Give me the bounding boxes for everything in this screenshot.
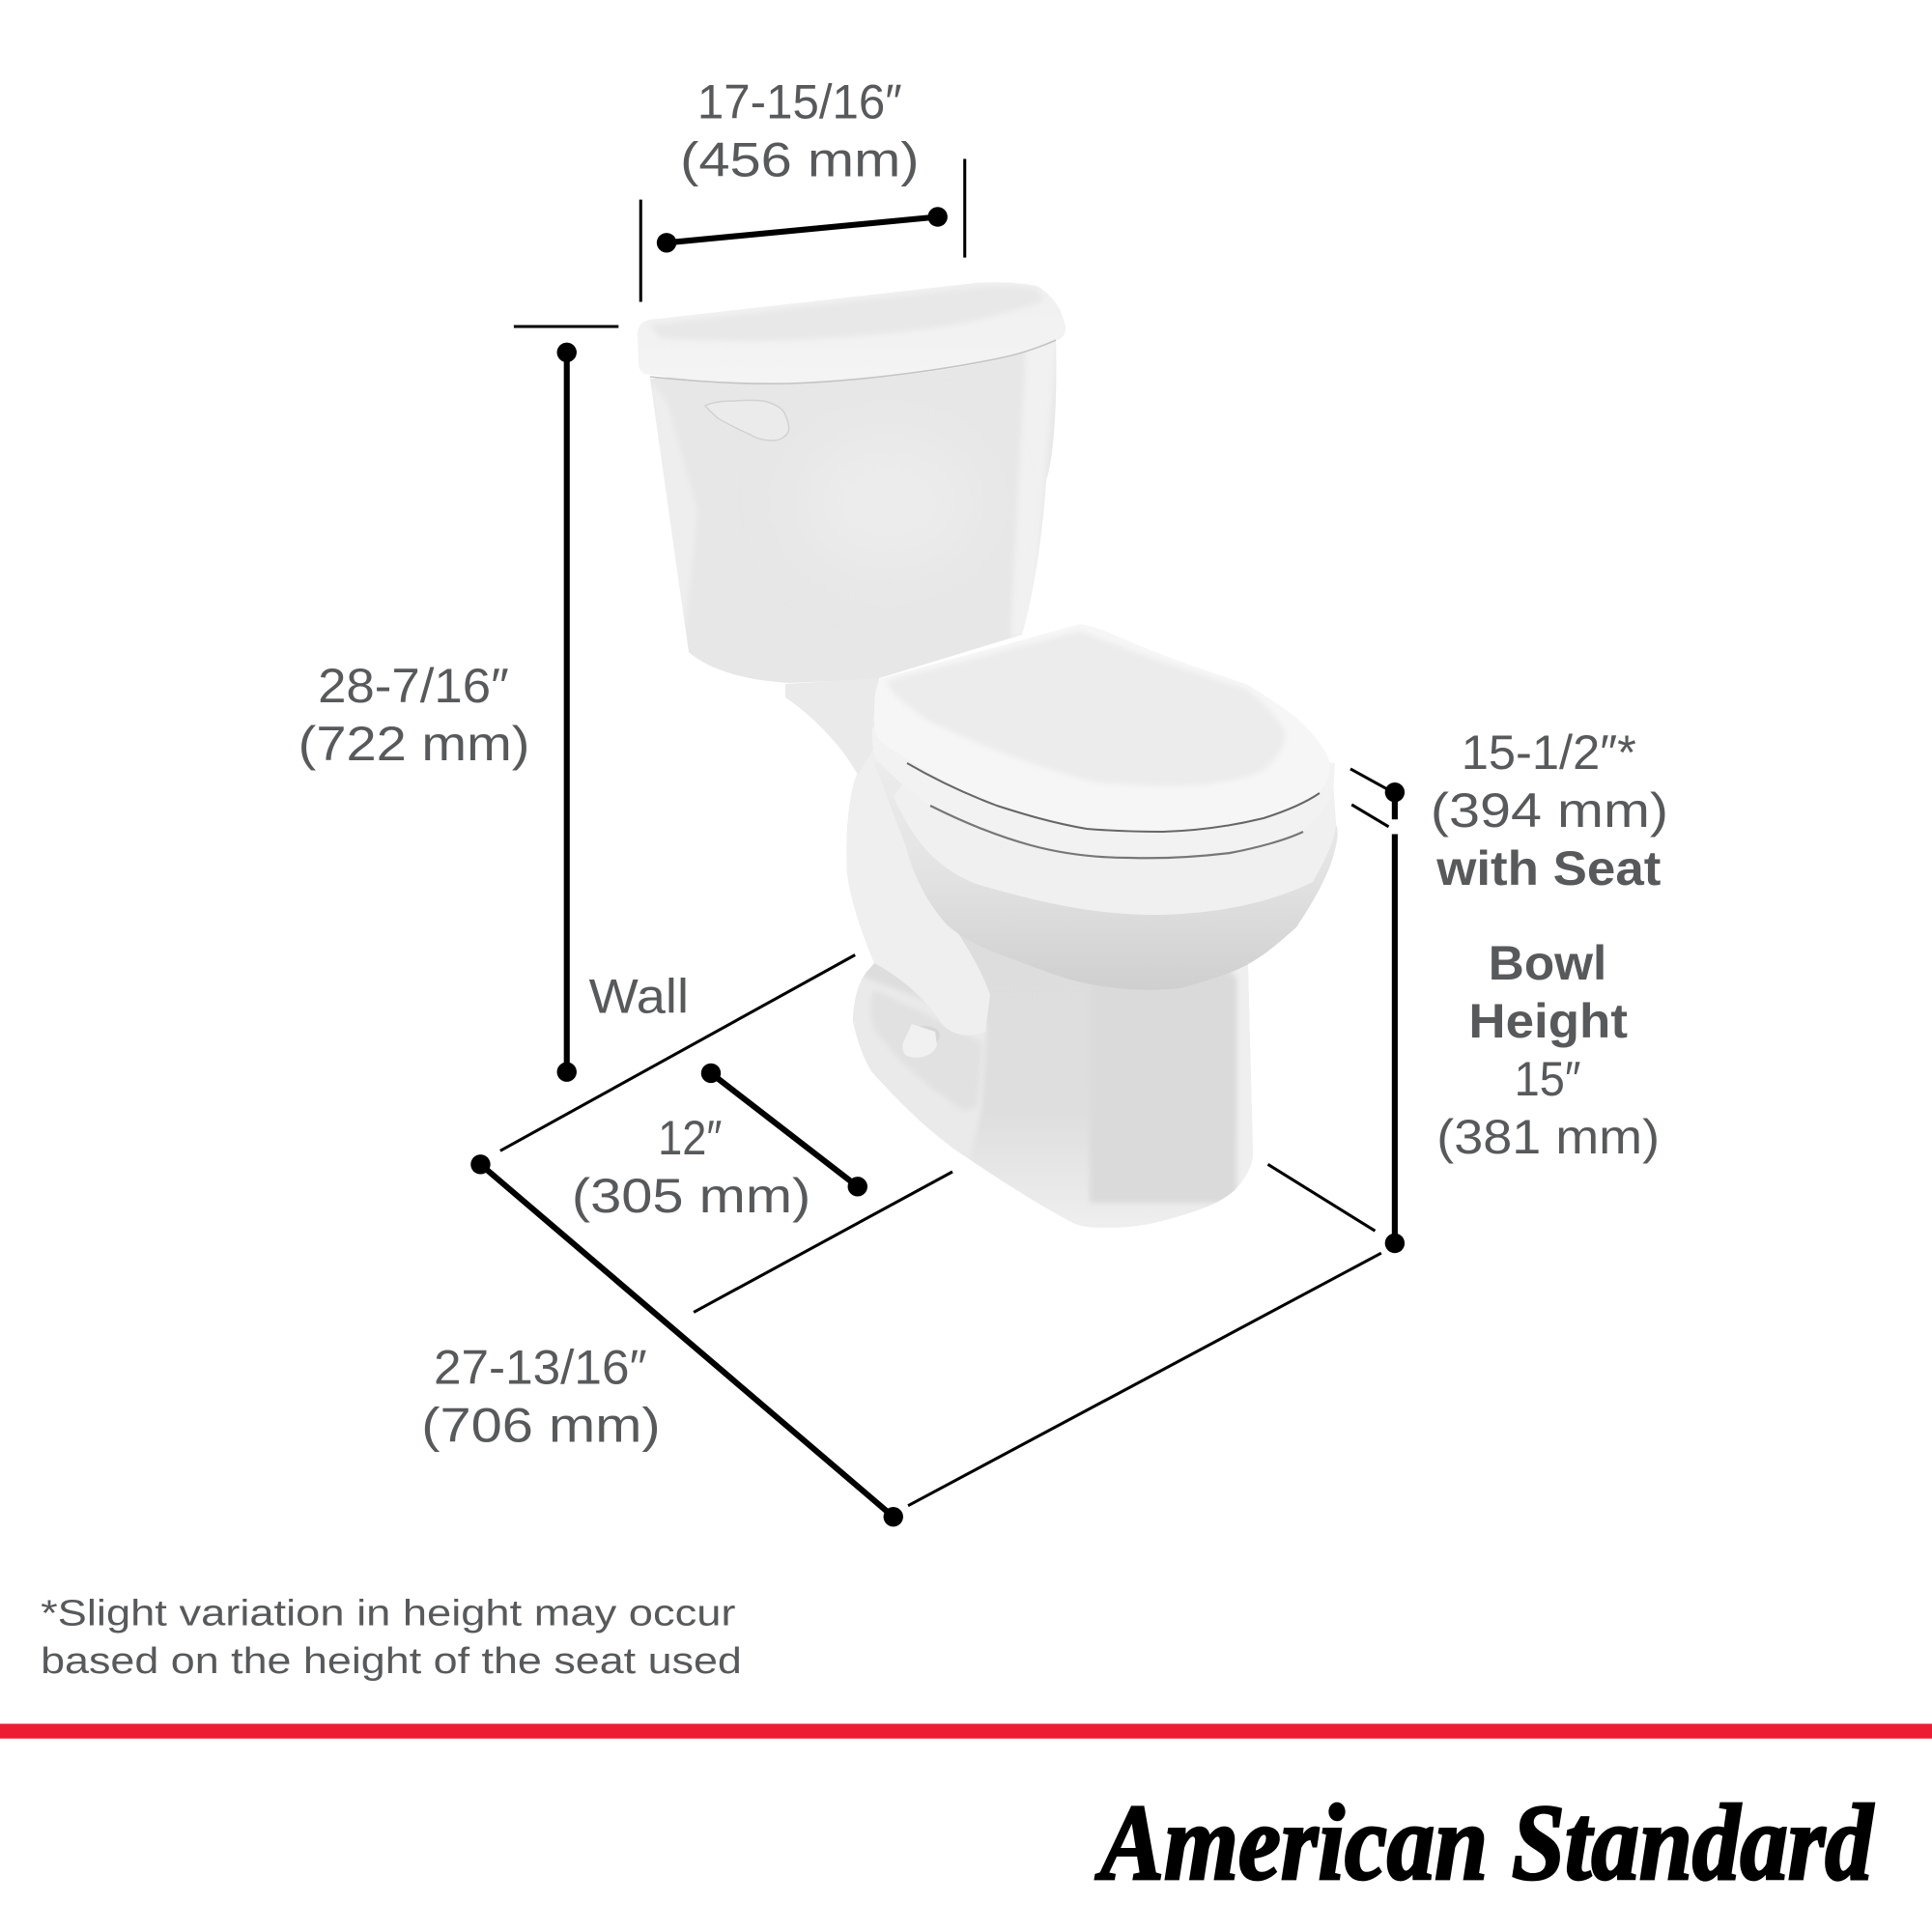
dimension: rough-in: (305 mm) [572,1169,810,1223]
bowl height labels: 15-1/2″* [1462,725,1636,780]
red divider [0,1723,1932,1739]
toilet tank body [650,341,1056,683]
dimension: tank width [640,74,965,301]
toilet bowl [874,763,1338,990]
toilet base [846,750,1253,1228]
footnote: *Slight variation in height may occur [41,1592,736,1634]
footnote [41,1592,742,1682]
pedestal panel corner [1090,976,1236,1203]
pedestal right highlight [1233,964,1253,1173]
footnote: based on the height of the seat used [41,1640,742,1682]
toilet tank lid [638,282,1065,384]
toilet tank neck [785,678,879,775]
dimension: bowl height: (381 mm) [1436,1110,1660,1164]
seat gap shadow [907,763,1320,832]
foot recess [875,997,979,1105]
dimension: bowl height [1350,725,1668,1253]
dimension: bowl height: (394 mm) [1431,783,1668,838]
dimension: tank width: (456 mm) [680,132,920,186]
seat ring [872,715,1335,858]
toilet illustration [638,282,1338,1236]
bowl rim shadow [930,806,1303,858]
seat lid recess [886,631,1286,786]
width label: 17-15/16″ [697,74,902,128]
dimension: bowl height: Height [1468,994,1628,1048]
bolt cap [902,1024,940,1058]
seat lid [874,624,1330,832]
tank shading [650,338,1058,657]
dimension: bowl height: Bowl [1489,936,1606,990]
dimension: overall depth [421,1154,1381,1526]
lid top face [649,286,1045,341]
depth label: 27-13/16″ [434,1340,647,1394]
flush lever [705,400,789,440]
foot rim [853,978,985,1138]
rough-in label: 12″ [658,1111,722,1165]
wall label: Wall [589,969,689,1023]
dimension: bowl height: 15″ [1515,1052,1580,1106]
lid shadow line [650,340,1056,384]
dimension: overall height [298,327,618,1082]
dimension: overall height: (722 mm) [298,717,529,771]
height label: 28-7/16″ [318,659,509,713]
width arrow [667,216,938,242]
bowl upper band [894,763,1336,915]
dimension: rough-in [500,955,952,1312]
trapway [843,744,990,1036]
dimension: bowl height: with Seat [1435,841,1661,895]
dimension: overall depth: (706 mm) [421,1398,661,1452]
width extension lines [640,159,965,301]
